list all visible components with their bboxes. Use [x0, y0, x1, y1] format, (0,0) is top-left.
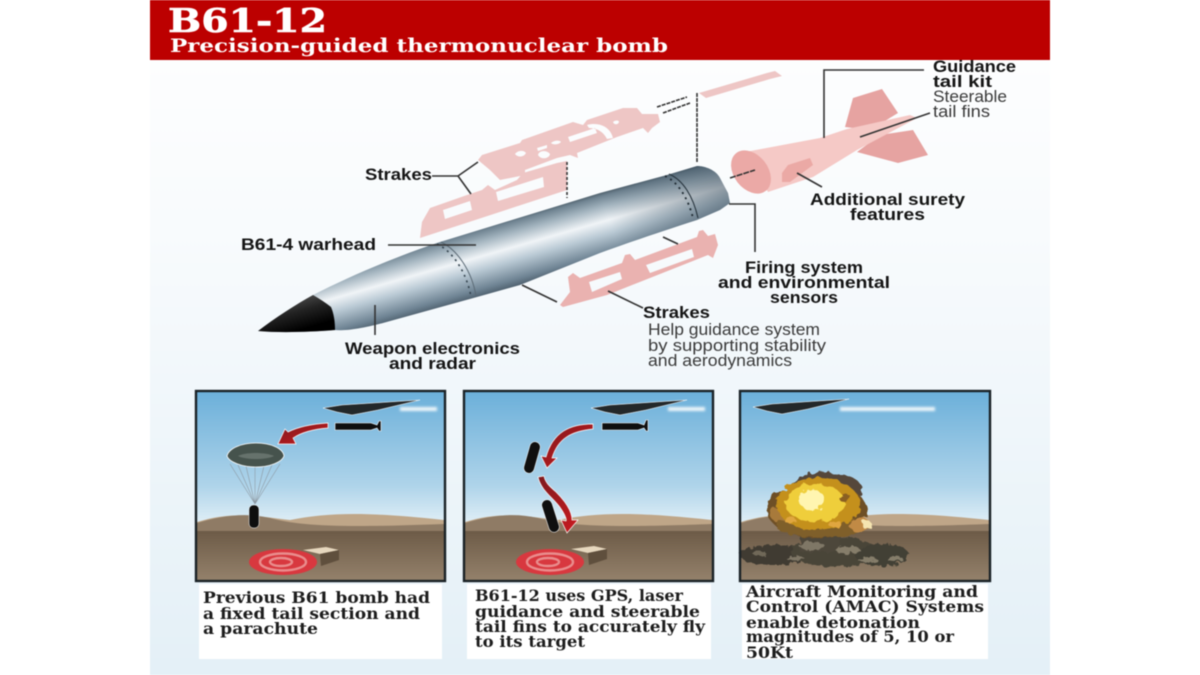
red arrow lower [538, 476, 578, 533]
B61-4 warhead body [258, 166, 730, 332]
caption: enable detonation [746, 613, 920, 632]
label: firing system: sensors [770, 289, 838, 307]
frame [196, 391, 445, 581]
label: strakes lower: Strakes [643, 304, 710, 322]
label: firing system: and environmental [718, 274, 890, 292]
label: guidance tail kit [933, 58, 1016, 121]
contrail [840, 407, 935, 411]
tail body [745, 115, 917, 192]
lower strake [560, 230, 718, 307]
diagram labels [241, 58, 1016, 373]
scene sky [465, 392, 712, 580]
label: guidance tail kit: tail fins [933, 103, 990, 121]
aircraft [753, 399, 849, 414]
rear shading [600, 166, 730, 253]
label: warhead: B61-4 warhead [241, 236, 376, 254]
target [249, 549, 317, 575]
target [516, 549, 584, 575]
exploded bomb diagram [258, 70, 930, 335]
caption box [199, 584, 442, 659]
label: firing system [718, 259, 890, 307]
header banner [150, 0, 1050, 60]
red arrow [278, 423, 328, 444]
bunker [571, 546, 607, 565]
top fin strake [699, 71, 782, 98]
scene hills [741, 514, 989, 535]
scene hills [465, 514, 712, 535]
bomb under parachute [249, 505, 259, 528]
red arrow upper [541, 424, 593, 468]
tilted bomb upper [529, 447, 535, 468]
subtitle: Precision-guided thermonuclear bomb [170, 35, 668, 57]
frame [464, 391, 713, 581]
panel: previous B61 [196, 391, 445, 659]
caption: guidance and steerable [475, 602, 700, 621]
caption: a parachute [203, 619, 318, 638]
panel: detonation [740, 391, 990, 662]
caption: Aircraft Monitoring and [745, 582, 978, 601]
upper tail fin [845, 89, 898, 130]
seam forward [437, 242, 476, 297]
tilted bomb lower [547, 505, 554, 527]
scene ground [741, 515, 989, 532]
falling bomb [335, 421, 381, 431]
black nose cone [258, 295, 335, 332]
leader lines and arrows [375, 70, 930, 335]
aircraft [591, 400, 687, 415]
smoke base [740, 528, 909, 567]
label: additional surety features [810, 191, 966, 224]
label: weapon electronics: Weapon electronics [345, 340, 520, 358]
label: strakes lower [643, 304, 827, 370]
label: strakes upper: Strakes [365, 166, 432, 184]
label: strakes lower: by supporting stability [648, 337, 827, 355]
label: guidance tail kit: Guidance [933, 58, 1016, 76]
fireball [767, 472, 872, 538]
caption [745, 582, 984, 662]
falling bomb [602, 420, 648, 431]
contrail [668, 407, 705, 411]
caption box [467, 584, 711, 659]
bunker [303, 547, 339, 566]
upper front strake [420, 161, 567, 238]
label: strakes lower: and aerodynamics [648, 352, 792, 370]
caption: tail fins to accurately fly [475, 617, 706, 636]
background panel [150, 0, 1050, 675]
caption: 50Kt [746, 643, 794, 662]
caption box [742, 584, 988, 659]
caption: B61-12 uses GPS, laser [475, 586, 684, 605]
label: firing system: Firing system [745, 259, 863, 277]
caption: Previous B61 bomb had [203, 588, 430, 607]
label: guidance tail kit: Steerable [933, 88, 1007, 106]
caption [475, 586, 706, 651]
label: strakes lower: Help guidance system [648, 321, 820, 339]
scene sky [741, 392, 989, 580]
tail kit [723, 89, 928, 201]
scene sky [197, 392, 444, 580]
title: B61-12 [168, 1, 327, 40]
caption [203, 588, 430, 638]
caption: magnitudes of 5, 10 or [746, 627, 955, 646]
surety hatch [782, 158, 813, 182]
tail opening [723, 143, 779, 201]
caption: a fixed tail section and [203, 604, 420, 623]
frame [740, 391, 990, 581]
aircraft [323, 400, 420, 415]
seam aft [665, 174, 698, 218]
caption: Control (AMAC) Systems [746, 597, 984, 616]
panel: B61-12 guided [464, 391, 713, 659]
label: guidance tail kit: tail kit [933, 73, 993, 91]
label: additional surety features: Additional surety [810, 191, 966, 209]
scene hills [197, 514, 444, 535]
scene ground [465, 515, 712, 532]
contrail [400, 407, 437, 411]
label: additional surety features: features [850, 206, 925, 224]
lower tail fin [857, 130, 928, 163]
label: and radar: and radar [389, 355, 477, 373]
upper plate strake with holes [478, 108, 660, 180]
caption: to its target [475, 632, 586, 651]
scene ground [197, 515, 444, 532]
parachute [227, 443, 284, 504]
